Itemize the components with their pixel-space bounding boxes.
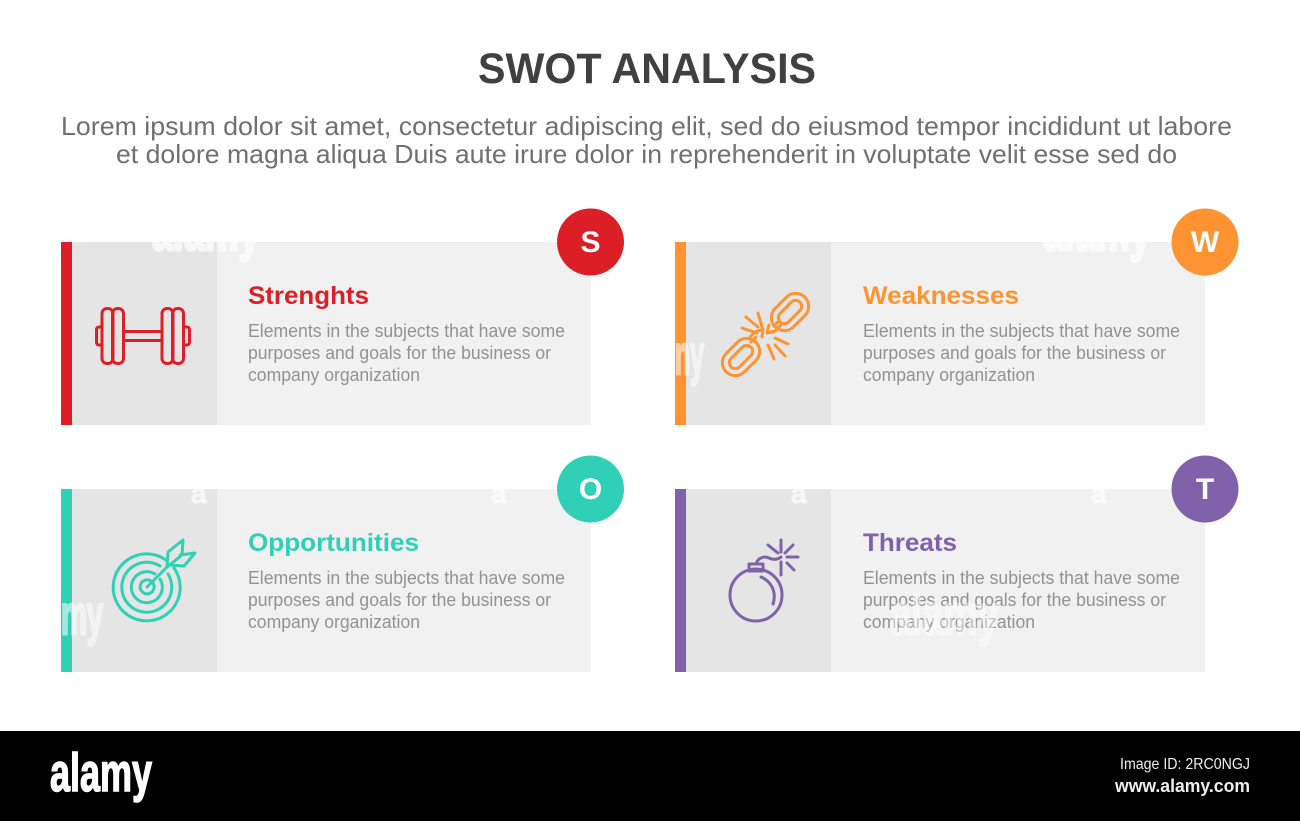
body text: weaknesses: company organization (863, 365, 1035, 385)
watermark: ny (675, 323, 704, 386)
subtitle: Lorem ipsum dolor sit amet, consectetur adipiscing elit, sed do eiusmod tempor incididunt ut labore (61, 111, 1232, 141)
heading: opportunities: Opportunities (248, 529, 419, 557)
watermark (61, 199, 1151, 646)
body text: opportunities (248, 568, 565, 632)
body text: strengths: purposes and goals for the business or (248, 343, 551, 363)
body text: strengths: company organization (248, 365, 420, 385)
badge: O: O (579, 473, 602, 506)
body text: opportunities: company organization (248, 612, 420, 632)
watermark: a (191, 478, 207, 509)
badge: W (1172, 208, 1238, 276)
watermark: a (1091, 478, 1107, 509)
watermark: a (791, 478, 807, 509)
body text: threats (863, 568, 1180, 632)
badge: O (557, 456, 624, 522)
badge: S (557, 208, 624, 276)
badge: T: T (1196, 473, 1214, 506)
badge: W: W (1191, 226, 1220, 259)
watermark: alamy (1043, 199, 1151, 262)
icon: bomb (730, 540, 798, 621)
body text: threats: Elements in the subjects that have some (863, 568, 1180, 588)
heading: strengths: Strenghts (248, 282, 369, 310)
panel: strengths (61, 208, 624, 425)
watermark: my (61, 583, 103, 646)
body text: weaknesses: Elements in the subjects that have some (863, 321, 1180, 341)
image id: Image ID: 2RC0NGJ (1120, 756, 1250, 773)
badge: S: S (580, 226, 601, 259)
watermark: a (491, 478, 507, 509)
heading: threats: Threats (863, 529, 957, 557)
body text: threats: purposes and goals for the business or (863, 590, 1166, 610)
body text: strengths (248, 321, 565, 385)
subtitle (61, 111, 1232, 169)
body text: threats: company organization (863, 612, 1035, 632)
watermark: alamy (152, 199, 260, 262)
panel: weaknesses (675, 208, 1238, 425)
subtitle: et dolore magna aliqua Duis aute irure dolor in reprehenderit in voluptate velit esse sed do (116, 139, 1177, 169)
icon: target with arrow (113, 540, 195, 621)
title: SWOT ANALYSIS (478, 45, 816, 93)
heading: weaknesses: Weaknesses (863, 282, 1019, 310)
icon: dumbbell (96, 308, 190, 364)
footer logo: alamy (50, 743, 152, 803)
website: www.alamy.com (1114, 776, 1250, 796)
body text: weaknesses: purposes and goals for the business or (863, 343, 1166, 363)
body text: strengths: Elements in the subjects that have some (248, 321, 565, 341)
panel: opportunities (61, 456, 624, 672)
body text: weaknesses (863, 321, 1180, 385)
panel: threats (675, 456, 1238, 672)
badge: T (1172, 456, 1238, 522)
watermark: alamy (890, 583, 999, 646)
body text: opportunities: purposes and goals for the business or (248, 590, 551, 610)
footer bar (0, 731, 1300, 821)
icon: broken chain (717, 288, 814, 381)
body text: opportunities: Elements in the subjects that have some (248, 568, 565, 588)
